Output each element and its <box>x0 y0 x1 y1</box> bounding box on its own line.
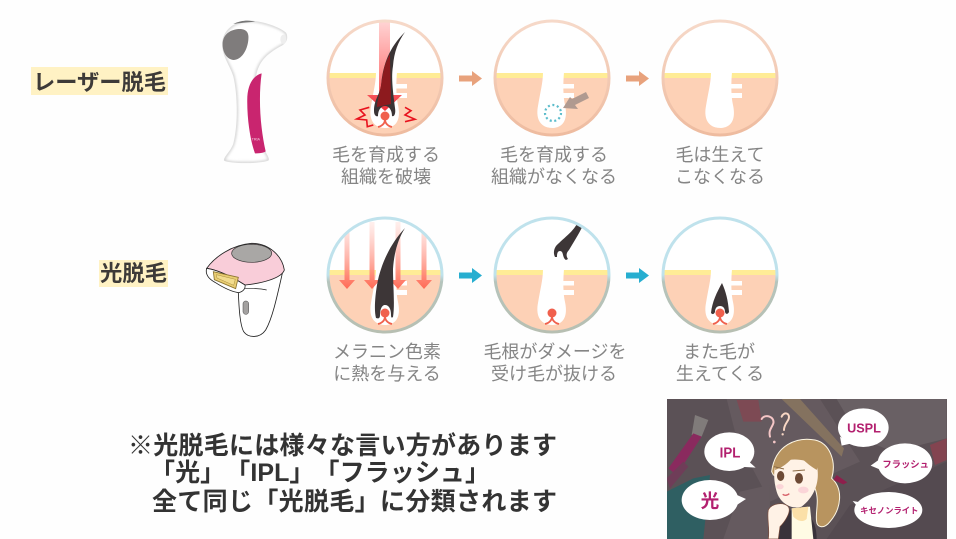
caption: laser step 3 <box>675 145 765 187</box>
pointer arrow <box>563 92 589 109</box>
diagram: laser step 2 <box>492 20 612 138</box>
heading: light hair removal: 光脱毛 <box>100 261 167 286</box>
light rays <box>339 222 432 289</box>
note text: 「光」「IPL」「フラッシュ」 <box>150 459 490 487</box>
arrow: laser step 1 to 2 <box>459 71 482 86</box>
diagram: light step 2 <box>492 217 612 335</box>
detached hair <box>554 222 583 260</box>
laser beam <box>367 18 402 111</box>
arrow: laser step 2 to 3 <box>626 71 649 86</box>
bubble: IPL <box>704 432 756 471</box>
bubble: USPL <box>838 408 889 447</box>
caption: laser step 1: 毛を育成する <box>332 145 440 165</box>
note text: 全て同じ「光脱毛」に分類されます <box>152 488 557 516</box>
bubble: 光: 光 <box>701 491 720 512</box>
illustration: confused woman with bubbles <box>667 399 947 539</box>
bubble: フラッシュ <box>871 443 932 483</box>
icon: light device <box>206 243 284 336</box>
bubble: USPL: USPL <box>847 422 881 436</box>
caption: light step 3: また毛が <box>683 342 755 362</box>
caption: laser step 2: 組織がなくなる <box>491 167 617 187</box>
icon: laser device <box>222 21 287 163</box>
diagram: laser step 1 <box>325 18 445 138</box>
damage sparks <box>357 107 415 127</box>
caption: laser step 2 <box>491 145 617 187</box>
bubble: 光 <box>682 480 746 520</box>
caption: light step 3: 生えてくる <box>676 364 764 384</box>
arrow: light step 1 to 2 <box>459 268 482 283</box>
caption: laser step 1 <box>332 145 440 187</box>
woman <box>768 439 847 539</box>
caption: light step 2: 毛根がダメージを <box>483 342 627 362</box>
heading: laser hair removal: レーザー脱毛 <box>33 70 166 95</box>
caption: laser step 3: 毛は生えて <box>675 145 765 165</box>
caption: laser step 3: こなくなる <box>675 167 765 187</box>
regrowing hair <box>711 283 729 314</box>
arrow: light step 2 to 3 <box>626 268 649 283</box>
caption: light step 2: 受け毛が抜ける <box>491 364 617 384</box>
caption: light step 1 <box>333 342 441 384</box>
icon: laser device: TRIA <box>252 138 261 142</box>
caption: laser step 2: 毛を育成する <box>500 145 608 165</box>
bubble: IPL: IPL <box>720 445 741 461</box>
caption: light step 3 <box>676 342 764 384</box>
bubble: キセノンライト <box>853 492 922 528</box>
bubble: フラッシュ: フラッシュ <box>882 460 929 470</box>
photo background objects <box>667 399 947 539</box>
caption: laser step 1: 組織を破壊 <box>341 167 431 187</box>
diagram: light step 1 <box>325 217 445 335</box>
caption: light step 2 <box>483 342 627 384</box>
caption: light step 1: メラニン色素 <box>333 342 441 362</box>
note text: ※光脱毛には様々な言い方があります <box>128 431 557 460</box>
diagram: laser step 3 <box>660 20 780 138</box>
bubble: キセノンライト: キセノンライト <box>860 506 918 516</box>
tissue gone marker <box>545 105 561 121</box>
caption: light step 1: に熱を与える <box>333 364 441 384</box>
diagram: light step 3 <box>660 217 780 335</box>
note text <box>128 431 557 516</box>
question marks <box>762 413 789 437</box>
